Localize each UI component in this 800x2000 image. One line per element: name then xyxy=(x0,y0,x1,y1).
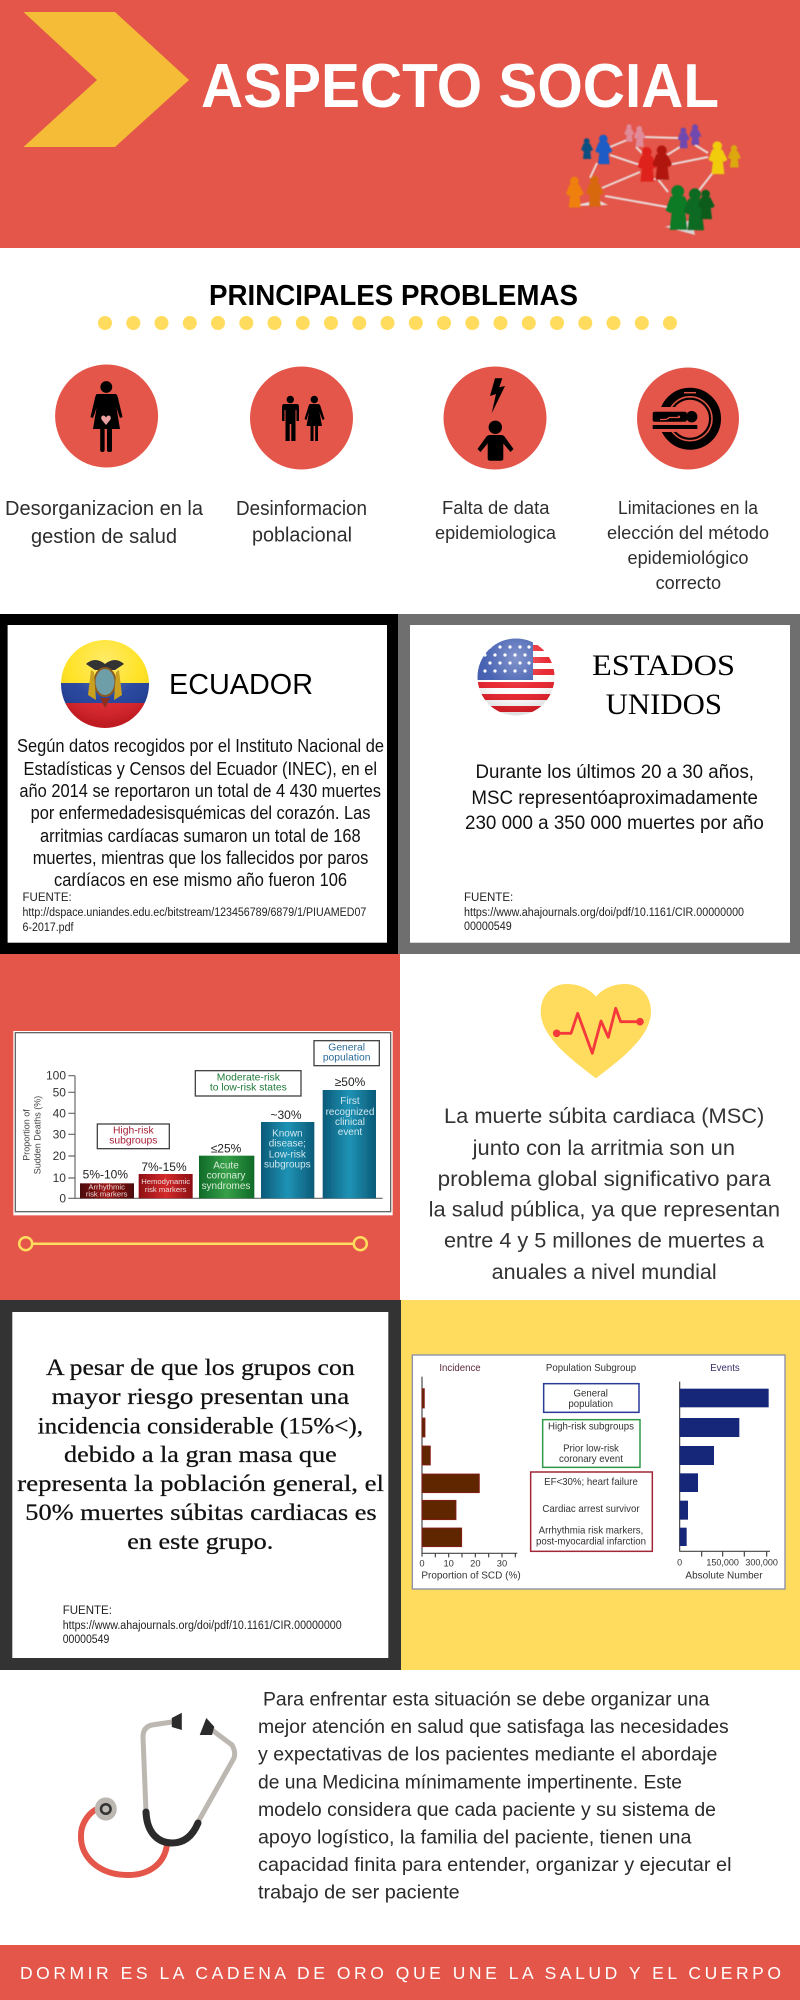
panel: dark text section xyxy=(0,1300,401,1670)
chart: incidence and events by subgroup: 0 xyxy=(419,1559,425,1569)
text: MSC description: anuales a nivel mundial xyxy=(492,1261,717,1284)
chart: incidence and events by subgroup: Proportion of SCD (%) xyxy=(421,1571,521,1582)
chart: proportion of sudden deaths: risk markers xyxy=(145,1185,187,1194)
icon: man and woman in red circle xyxy=(250,366,353,470)
chart: proportion of sudden deaths: General xyxy=(328,1042,365,1053)
chart: proportion of sudden deaths: Acute xyxy=(213,1160,239,1171)
text: Ecuador paragraph xyxy=(17,736,384,890)
text: Ecuador paragraph: muertes, mientras que los fallecidos por paros xyxy=(33,848,368,868)
text: Ecuador paragraph: Estadísticas y Censos del Ecuador (INEC), en el xyxy=(24,759,377,779)
text: problem 3: Falta de data xyxy=(442,498,551,518)
text: care model paragraph: Para enfrentar esta situación se debe organizar una xyxy=(263,1689,710,1711)
text: Ecuador paragraph: cardíacos en ese mismo año fueron 106 xyxy=(54,870,347,890)
icon: yellow chevron xyxy=(24,12,189,147)
source: USA: https://www.ahajournals.org/doi/pdf/10.1161/CIR.00000000 xyxy=(464,907,744,919)
chart: incidence and events by subgroup: Absolute Number xyxy=(685,1571,763,1582)
text: USA paragraph: MSC representóaproximadamente xyxy=(471,788,758,809)
text: care model paragraph: mejor atención en salud que satisfaga las necesidades xyxy=(258,1716,729,1738)
panel: heart text section xyxy=(429,984,780,1284)
text: care model paragraph: apoyo logístico, la familia del paciente, tienen una xyxy=(258,1826,692,1848)
slider line decoration xyxy=(19,1237,367,1250)
source: Ecuador: http://dspace.uniandes.edu.ec/bitstream/123456789/6879/1/PIUAMED07 xyxy=(22,907,366,919)
title: ASPECTO SOCIAL xyxy=(201,52,719,121)
text: MSC description: entre 4 y 5 millones de muertes a xyxy=(444,1230,764,1253)
text: MSC description: problema global significativo para xyxy=(438,1168,771,1191)
text: population incidence xyxy=(17,1355,384,1554)
text: problem 2 xyxy=(236,498,367,547)
chart: incidence and events by subgroup: 300,000 xyxy=(745,1557,778,1567)
text: problem 3 xyxy=(435,498,557,543)
chart: proportion of sudden deaths xyxy=(13,1031,393,1215)
chart: proportion of sudden deaths: ~30% xyxy=(270,1108,302,1122)
text: Ecuador paragraph: Según datos recogidos por el Instituto Nacional de xyxy=(17,736,384,756)
panel: header xyxy=(0,0,800,248)
text: care model paragraph: capacidad finita para entender, organizar y ejecutar el xyxy=(258,1854,732,1876)
label: ESTADOS UNIDOS: ESTADOS xyxy=(592,649,735,682)
text: care model paragraph: de una Medicina mínimamente impertinente. Este xyxy=(258,1771,682,1793)
label: ESTADOS UNIDOS: UNIDOS xyxy=(606,688,722,721)
chart: incidence and events by subgroup: Arrhythmia risk markers, xyxy=(539,1526,643,1537)
label: ECUADOR: ECUADOR xyxy=(169,669,313,701)
chart: incidence and events by subgroup: Events xyxy=(710,1363,740,1374)
chart: proportion of sudden deaths: disease; xyxy=(269,1139,306,1150)
chart: incidence and events by subgroup: General xyxy=(573,1389,608,1400)
panel: red chart section xyxy=(0,954,400,1300)
text: problem 2: poblacional xyxy=(252,525,352,547)
source: Ecuador: 6-2017.pdf xyxy=(22,922,74,934)
text: MSC description: La muerte súbita cardiaca (MSC) xyxy=(444,1105,764,1128)
source: Ecuador: FUENTE: xyxy=(22,892,72,904)
text: Ecuador paragraph: arritmias cardíacas sumaron un total de 168 xyxy=(40,826,361,846)
chart: proportion of sudden deaths: Proportion of xyxy=(21,1109,31,1161)
panel: yellow chart section xyxy=(401,1300,800,1670)
chart: proportion of sudden deaths: Known xyxy=(272,1129,303,1140)
source: USA xyxy=(464,892,744,933)
text: population incidence: incidencia considerable (15%<), xyxy=(38,1413,363,1438)
chart: proportion of sudden deaths: 30 xyxy=(53,1127,66,1141)
chart: proportion of sudden deaths: Sudden Deaths (%) xyxy=(33,1096,43,1174)
text: population incidence: en este grupo. xyxy=(127,1529,273,1554)
text: care model paragraph: modelo considera que cada paciente y su sistema de xyxy=(258,1799,716,1821)
icon: Ecuador flag xyxy=(61,640,149,728)
chart: proportion of sudden deaths: risk markers xyxy=(86,1190,128,1199)
text: care model paragraph: trabajo de ser paciente xyxy=(258,1881,460,1903)
chart: proportion of sudden deaths: clinical xyxy=(335,1117,365,1128)
source: USA: 00000549 xyxy=(464,921,512,933)
chart: incidence and events by subgroup: 0 xyxy=(677,1557,682,1567)
icon: USA flag xyxy=(477,638,558,716)
source: AHA journals: FUENTE: xyxy=(63,1605,112,1617)
text: problem 1 xyxy=(5,498,204,548)
panel: Estados Unidos xyxy=(398,614,800,954)
chart: proportion of sudden deaths: 20 xyxy=(53,1149,66,1163)
text: problem 1: gestion de salud xyxy=(31,526,177,548)
panel: Ecuador xyxy=(0,614,399,954)
text: population incidence: A pesar de que los grupos con xyxy=(46,1355,355,1380)
text: MSC description: junto con la arritmia son un xyxy=(472,1137,735,1160)
chart: proportion of sudden deaths: coronary xyxy=(207,1171,245,1182)
chart: proportion of sudden deaths: 100 xyxy=(46,1069,66,1083)
chart: incidence and events by subgroup: coronary event xyxy=(559,1454,623,1465)
text: problem 4: epidemiológico xyxy=(628,548,748,568)
chart: proportion of sudden deaths: syndromes xyxy=(202,1181,250,1192)
chart: incidence and events by subgroup: 150,000 xyxy=(706,1557,739,1567)
footer banner xyxy=(0,1945,800,2000)
chart: proportion of sudden deaths: ≤25% xyxy=(211,1141,242,1155)
text: population incidence: debido a la gran masa que xyxy=(64,1442,337,1467)
text: problem 4: Limitaciones en la xyxy=(618,498,759,518)
label: ESTADOS UNIDOS xyxy=(592,649,735,721)
text: MSC description xyxy=(429,1105,780,1284)
source: Ecuador xyxy=(22,892,366,934)
chart: proportion of sudden deaths: to low-risk states xyxy=(210,1083,287,1094)
icon: lightning above person in red circle xyxy=(444,366,546,470)
text: population incidence: mayor riesgo presentan una xyxy=(52,1384,349,1409)
chart: incidence and events by subgroup: population xyxy=(568,1399,613,1410)
chart: proportion of sudden deaths: 7%-15% xyxy=(141,1160,187,1174)
text: care model paragraph: y expectativas de los pacientes mediante el abordaje xyxy=(258,1744,717,1766)
chart: proportion of sudden deaths: subgroups xyxy=(264,1160,311,1171)
icon: heart with ECG line xyxy=(541,984,651,1078)
chart: proportion of sudden deaths: 0 xyxy=(59,1191,66,1205)
chart: proportion of sudden deaths: 10 xyxy=(53,1171,66,1185)
chart: proportion of sudden deaths: Hemodynamic xyxy=(141,1177,190,1186)
chart: incidence and events by subgroup: Cardiac arrest survivor xyxy=(542,1504,640,1515)
chart: incidence and events by subgroup: 20 xyxy=(470,1559,481,1569)
text: care model paragraph xyxy=(258,1689,732,1903)
text: problem 4: correcto xyxy=(656,573,721,593)
text: Ecuador paragraph: año 2014 se reportaron un total de 4 430 muertes xyxy=(19,781,381,801)
chart: proportion of sudden deaths: 50 xyxy=(53,1085,66,1099)
chart: incidence and events by subgroup: Incidence xyxy=(439,1363,481,1374)
chart: proportion of sudden deaths: 40 xyxy=(53,1106,66,1120)
icon: pregnant woman in red circle xyxy=(55,364,158,468)
chart: incidence and events by subgroup xyxy=(412,1355,785,1589)
icon: social network of people xyxy=(567,125,740,235)
chart: incidence and events by subgroup: Population Subgroup xyxy=(546,1363,636,1374)
chart: proportion of sudden deaths: Low-risk xyxy=(269,1149,306,1160)
text: USA paragraph: 230 000 a 350 000 muertes por año xyxy=(465,813,764,834)
text: population incidence: representa la población general, el xyxy=(17,1471,384,1496)
chart: incidence and events by subgroup: High-risk subgroups xyxy=(548,1421,634,1432)
text: USA paragraph: Durante los últimos 20 a 30 años, xyxy=(476,762,754,783)
icon: stethoscope xyxy=(81,1713,235,1875)
text: USA paragraph xyxy=(465,762,764,834)
text: problem 4 xyxy=(607,498,769,593)
text: population incidence: 50% muertes súbitas cardiacas es xyxy=(25,1500,377,1525)
chart: proportion of sudden deaths: population xyxy=(323,1053,371,1064)
yellow dotted divider xyxy=(98,316,677,330)
chart: incidence and events by subgroup: 30 xyxy=(497,1559,507,1569)
text: problem 3: epidemiologica xyxy=(435,523,557,543)
source: AHA journals xyxy=(63,1605,342,1646)
chart: proportion of sudden deaths: First xyxy=(340,1096,360,1107)
chart: incidence and events by subgroup: Prior low-risk xyxy=(563,1443,619,1454)
source: USA: FUENTE: xyxy=(464,892,513,904)
chart: proportion of sudden deaths: subgroups xyxy=(109,1136,157,1147)
heading: principales problemas: PRINCIPALES PROBLEMAS xyxy=(209,280,578,312)
chart: proportion of sudden deaths: 5%-10% xyxy=(83,1168,128,1182)
chart: proportion of sudden deaths: Arrhythmic xyxy=(88,1182,125,1191)
text: Ecuador paragraph: por enfermedadesisquémicas del corazón. Las xyxy=(31,803,370,823)
text: problem 2: Desinformacion xyxy=(236,498,367,520)
chart: proportion of sudden deaths: Moderate-risk xyxy=(217,1072,281,1083)
text: MSC description: la salud pública, ya que representan xyxy=(429,1199,780,1222)
chart: incidence and events by subgroup: EF<30%; heart failure xyxy=(544,1477,638,1488)
chart: proportion of sudden deaths: recognized xyxy=(326,1107,374,1118)
icon: MRI scanner in red circle xyxy=(637,368,739,470)
chart: proportion of sudden deaths: High-risk xyxy=(113,1125,155,1136)
source: AHA journals: https://www.ahajournals.org/doi/pdf/10.1161/CIR.00000000 xyxy=(63,1620,342,1632)
chart: incidence and events by subgroup: post-myocardial infarction xyxy=(536,1536,646,1547)
text: problem 1: Desorganizacion en la xyxy=(5,498,204,520)
source: AHA journals: 00000549 xyxy=(63,1634,109,1646)
footer quote: DORMIR ES LA CADENA DE ORO QUE UNE LA SALUD Y EL CUERPO xyxy=(20,1963,781,1983)
chart: proportion of sudden deaths: event xyxy=(338,1127,362,1138)
chart: proportion of sudden deaths: ≥50% xyxy=(335,1075,366,1089)
chart: incidence and events by subgroup: 10 xyxy=(443,1559,454,1569)
text: problem 4: elección del método xyxy=(607,523,769,543)
